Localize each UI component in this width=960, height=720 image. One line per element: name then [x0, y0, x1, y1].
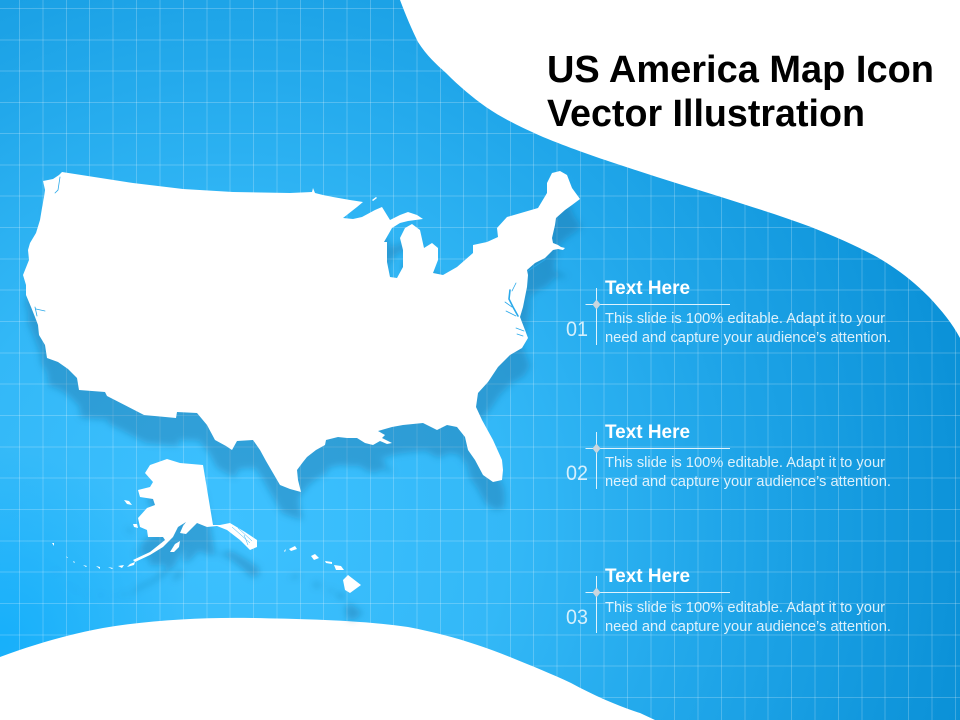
- item 03: [566, 566, 891, 635]
- item 01: [566, 278, 891, 346]
- item 02 description: This slide is 100% editable. Adapt it to your: [605, 454, 885, 471]
- item 01 connector: [586, 288, 730, 345]
- title: US America Map Icon: [547, 49, 934, 91]
- item 03 description: This slide is 100% editable. Adapt it to your: [605, 599, 885, 616]
- white wave: bottom: [0, 618, 655, 720]
- title: Vector Illustration: [547, 93, 865, 135]
- item 02 number: 02: [566, 462, 588, 485]
- US map: [23, 171, 580, 593]
- contiguous states: [23, 171, 580, 492]
- item 01 heading: Text Here: [605, 278, 690, 299]
- item 01 description: This slide is 100% editable. Adapt it to your: [605, 310, 885, 327]
- item 02: [566, 422, 891, 490]
- map shadow: [25, 199, 582, 621]
- white wave: top right: [400, 0, 960, 338]
- item 02 description: need and capture your audience’s attention.: [605, 473, 891, 490]
- item 01 description: need and capture your audience’s attention.: [605, 329, 891, 346]
- item 03 heading: Text Here: [605, 566, 690, 587]
- item 02 connector: [586, 432, 730, 489]
- item 01 number: 01: [566, 318, 588, 341]
- bays and inlets: [35, 177, 546, 336]
- title: [547, 49, 934, 135]
- item 03 connector: [586, 576, 730, 633]
- Alaska: [133, 459, 257, 562]
- Islands, Hawaii and Aleutians: [52, 197, 377, 593]
- item 02 heading: Text Here: [605, 422, 690, 443]
- item 03 number: 03: [566, 606, 588, 629]
- item 03 description: need and capture your audience’s attention.: [605, 618, 891, 635]
